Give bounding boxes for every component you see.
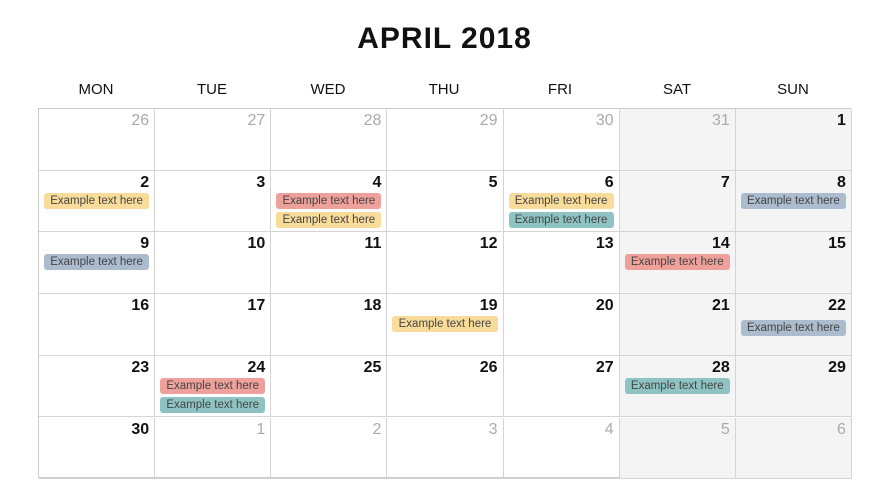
calendar grid: 17 [247,297,265,314]
calendar grid: 24 [247,359,265,376]
text: WED [310,81,346,98]
calendar grid: Example text here [282,214,375,226]
title: APRIL 2018 [357,22,532,55]
weekday headers [78,81,809,98]
calendar grid: 25 [364,359,381,376]
calendar grid: Example text here [50,195,143,207]
calendar grid: 4 [372,174,381,191]
calendar grid: 20 [596,297,614,314]
calendar grid: Example text here [515,195,607,207]
calendar grid: 29 [828,359,846,376]
calendar grid: 28 [364,112,381,129]
text: THU [429,81,459,98]
calendar grid: Example text here [631,256,724,268]
calendar grid: Example text here [515,214,607,226]
calendar grid: 29 [480,112,498,129]
calendar grid: Example text here [50,256,143,268]
text: FRI [548,81,572,98]
calendar grid: 26 [131,112,149,129]
calendar grid: 13 [596,235,614,252]
calendar grid: Example text here [166,380,259,392]
calendar grid: 10 [247,235,265,252]
calendar grid: Example text here [631,380,724,392]
calendar grid: Example text here [282,195,375,207]
calendar grid: 6 [605,174,614,191]
calendar grid: 23 [131,359,149,376]
calendar grid: 5 [489,174,498,191]
calendar grid: 15 [828,235,846,252]
calendar grid: 21 [712,297,730,314]
calendar grid: 30 [596,112,614,129]
calendar grid: 14 [712,235,730,252]
calendar grid: 2 [372,420,381,438]
text: MON [78,81,114,98]
calendar grid: 9 [140,235,149,252]
calendar grid: 1 [256,420,265,438]
calendar grid: 31 [712,112,730,129]
calendar grid: 2 [140,174,149,191]
calendar grid: 1 [837,112,846,129]
calendar grid: 28 [712,359,730,376]
text: SUN [777,81,809,98]
calendar grid: 19 [480,297,498,314]
calendar grid: 11 [364,235,381,252]
calendar grid: 3 [489,420,498,438]
calendar grid: Example text here [166,399,259,411]
calendar grid [38,108,851,478]
text: TUE [197,81,227,98]
text: SAT [663,81,691,98]
calendar grid: Example text here [399,318,491,330]
calendar grid: Example text here [747,322,840,334]
calendar grid: Example text here [747,195,840,207]
calendar grid: 3 [256,174,265,191]
calendar grid: 22 [828,297,846,314]
calendar grid: 27 [596,359,614,376]
calendar grid: 30 [131,420,149,438]
calendar grid: 8 [837,174,846,191]
calendar grid: 16 [131,297,149,314]
calendar grid: 26 [480,359,498,376]
calendar grid: 6 [837,420,846,438]
calendar grid: 18 [364,297,381,314]
calendar grid: 7 [721,174,730,191]
calendar grid: 27 [247,112,265,129]
calendar grid: 12 [480,235,498,252]
calendar grid: 4 [605,420,614,438]
calendar grid: 5 [721,420,730,438]
